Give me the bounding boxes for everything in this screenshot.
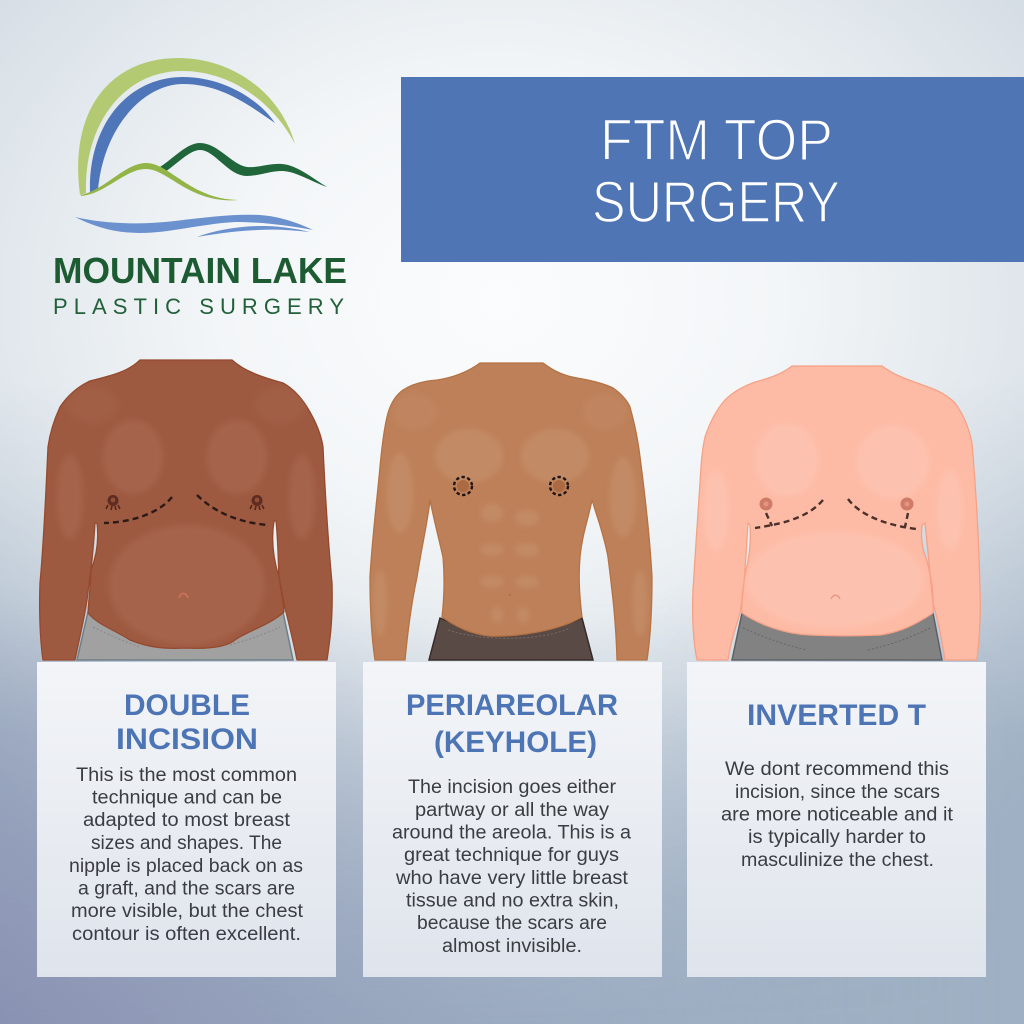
panel: inverted T xyxy=(687,662,986,977)
text: periareolar description: great technique for guys xyxy=(404,845,619,866)
heading: double incision: DOUBLE xyxy=(124,689,250,722)
figure: periareolar torso xyxy=(370,363,652,660)
text: double incision description: technique and can be xyxy=(92,788,282,808)
muscle highlights xyxy=(704,424,962,628)
text: periareolar description: because the scars are xyxy=(417,913,607,934)
icon: logo dark green mountain xyxy=(160,143,327,187)
garment: grey waistband xyxy=(732,613,942,660)
icon: logo water waves xyxy=(75,215,313,237)
navel xyxy=(509,594,511,596)
text: double incision description: This is the most common xyxy=(76,765,297,786)
text: double incision description: sizes and shapes. The xyxy=(91,833,282,854)
incision lines xyxy=(755,499,916,529)
torso body xyxy=(693,366,980,660)
heading: inverted T: INVERTED T xyxy=(747,699,926,732)
text: double incision description: adapted to most breast xyxy=(83,810,291,831)
panel: periareolar (keyhole) xyxy=(363,662,662,977)
incision lines: dashed circles xyxy=(454,477,568,495)
torso body xyxy=(370,363,652,660)
title banner xyxy=(401,77,1024,262)
text: periareolar description: partway or all the way xyxy=(415,800,610,821)
areolas xyxy=(760,498,914,510)
text: double incision description: contour is often excellent. xyxy=(72,924,301,945)
text: double incision description xyxy=(69,765,304,945)
heading: periareolar (keyhole): PERIAREOLAR xyxy=(406,689,618,722)
text: periareolar description: almost invisible. xyxy=(442,936,582,957)
title xyxy=(592,108,840,235)
text: inverted T description xyxy=(721,759,954,871)
incision lines xyxy=(104,495,267,525)
title: FTM TOP xyxy=(600,108,833,173)
figure: inverted T torso xyxy=(693,366,980,660)
text: inverted T description: are more noticeable and it xyxy=(721,804,954,826)
title: SURGERY xyxy=(592,170,840,235)
garment: dark waistband xyxy=(429,618,593,660)
icon: logo light green mountain xyxy=(81,163,238,200)
figure: double incision torso xyxy=(40,360,332,660)
text: double incision description: nipple is placed back on as xyxy=(69,856,303,877)
garment: grey waistband xyxy=(77,612,293,660)
navel xyxy=(831,595,840,599)
text: inverted T description: incision, since the scars xyxy=(735,782,940,803)
nipples xyxy=(106,495,264,510)
muscle highlights xyxy=(374,430,646,632)
text: periareolar description: around the areola. This is a xyxy=(392,822,631,844)
logo: Mountain Lake Plastic Surgery xyxy=(53,58,347,319)
heading: double incision: INCISION xyxy=(116,723,258,756)
text: periareolar description xyxy=(392,777,631,957)
text: inverted T description: We dont recommend this xyxy=(725,759,949,780)
logo tagline: PLASTIC SURGERY xyxy=(53,294,344,319)
areolas xyxy=(457,480,565,492)
muscle highlights xyxy=(57,387,315,645)
text: periareolar description: tissue and no extra skin, xyxy=(406,890,619,912)
heading: periareolar (keyhole): (KEYHOLE) xyxy=(434,726,597,759)
text: double incision description: a graft, and the scars are xyxy=(78,878,295,900)
icon: logo light green arc xyxy=(78,58,295,195)
torso body xyxy=(40,360,332,660)
text: inverted T description: masculinize the chest. xyxy=(741,850,934,871)
heading: periareolar (keyhole) xyxy=(406,689,618,759)
text: periareolar description: who have very little breast xyxy=(395,868,629,889)
logo wordmark: MOUNTAIN LAKE xyxy=(53,250,347,291)
panel: double incision xyxy=(37,662,336,977)
navel xyxy=(179,594,188,598)
icon: logo blue arc xyxy=(90,77,275,192)
text: double incision description: more visible, but the chest xyxy=(71,901,304,922)
text: inverted T description: is typically harder to xyxy=(748,827,926,848)
text: periareolar description: The incision goes either xyxy=(408,777,617,798)
heading: double incision xyxy=(116,689,258,756)
